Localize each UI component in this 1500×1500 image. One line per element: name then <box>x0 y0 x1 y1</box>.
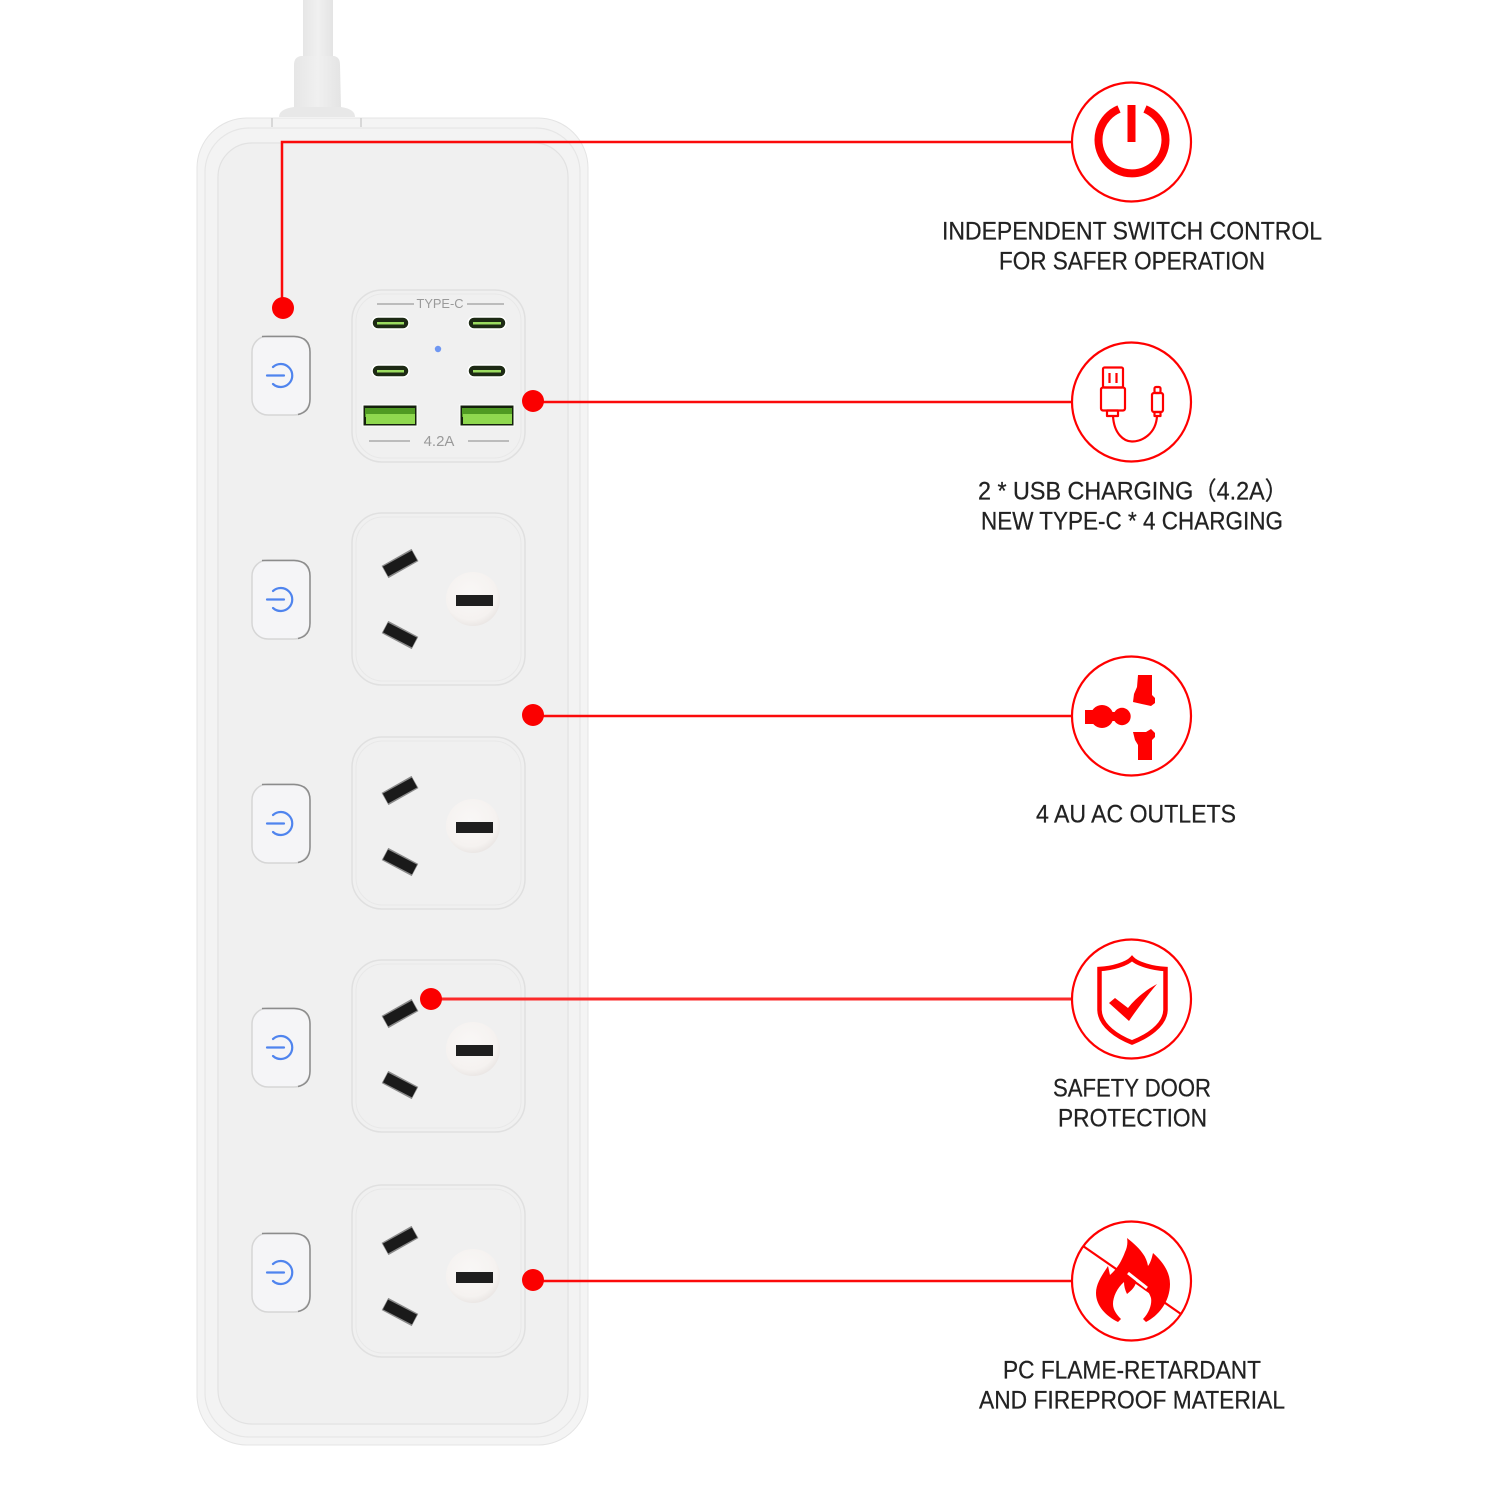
text: AU outlets: 4 AU AC OUTLETS <box>1036 800 1236 828</box>
text: switch control <box>942 218 1322 276</box>
power cord <box>279 0 355 117</box>
AU outlet 1 <box>352 513 525 685</box>
AU outlet 4 <box>352 1185 525 1357</box>
text: USB charging <box>978 478 1288 536</box>
AU outlet 2 <box>352 737 525 909</box>
AU outlet 3 <box>352 960 525 1132</box>
text: flame retardant <box>979 1356 1285 1414</box>
text: flame retardant: AND FIREPROOF MATERIAL <box>979 1386 1285 1414</box>
text: switch control: FOR SAFER OPERATION <box>999 248 1265 276</box>
USB-A ports <box>363 405 514 426</box>
text: safety door: SAFETY DOOR <box>1053 1074 1211 1102</box>
switch button 1 <box>252 336 310 415</box>
switch button 2 <box>252 560 310 639</box>
text: USB charging: NEW TYPE-C * 4 CHARGING <box>981 508 1283 536</box>
callout: outlets leader line <box>522 704 1072 726</box>
text: USB charging: 2 * USB CHARGING（4.2A） <box>978 478 1288 506</box>
icon: safety shield <box>1072 940 1191 1058</box>
icon: USB cable <box>1072 342 1191 462</box>
text: safety door <box>1053 1074 1211 1132</box>
text: safety door: PROTECTION <box>1058 1104 1207 1132</box>
icon: power <box>1072 82 1191 202</box>
icon: no flame <box>1072 1222 1191 1340</box>
USB charging module <box>352 290 525 462</box>
indicator LED <box>435 346 441 352</box>
label: 4.2A: 4.2A <box>424 433 454 450</box>
Type-C ports <box>372 317 506 377</box>
callout: switch leader line <box>272 142 1072 319</box>
power strip body <box>197 118 588 1445</box>
switch button 3 <box>252 784 310 863</box>
callout: material leader line <box>522 1269 1072 1291</box>
switch button 5 <box>252 1233 310 1312</box>
text: switch control: INDEPENDENT SWITCH CONTROL <box>942 218 1322 246</box>
text: flame retardant: PC FLAME-RETARDANT <box>1003 1356 1261 1384</box>
switch button 4 <box>252 1008 310 1087</box>
label: TYPE-C: TYPE-C <box>416 297 464 311</box>
callout: safety door leader line <box>420 988 1072 1010</box>
callout: USB leader line <box>522 390 1072 412</box>
icon: AU plug pins <box>1072 656 1191 776</box>
